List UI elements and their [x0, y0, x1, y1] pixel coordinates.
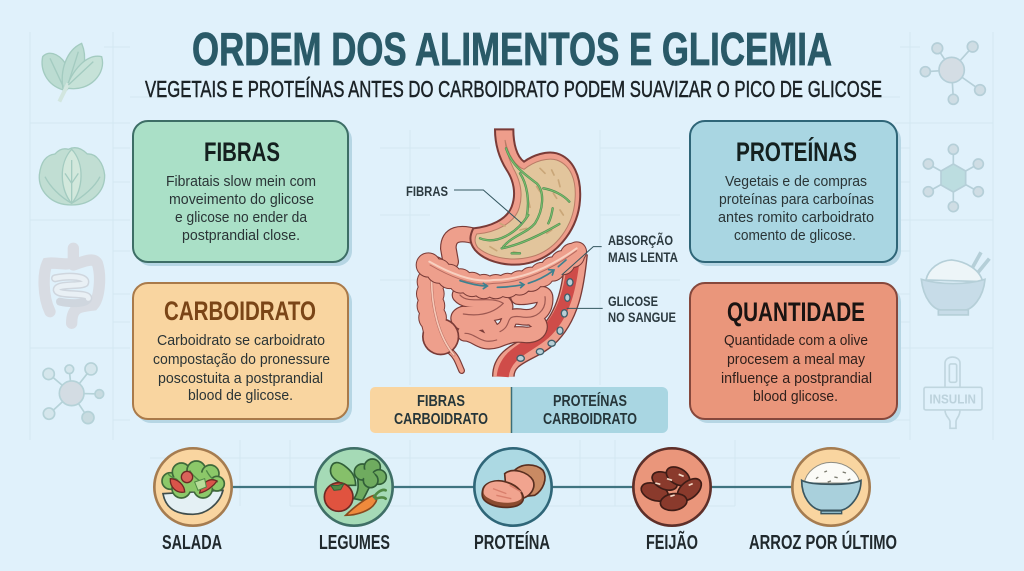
label: arroz por último: ARROZ POR ÚLTIMO	[749, 530, 897, 554]
heading: carboidrato: CARBOIDRATO	[164, 296, 316, 326]
text block: carboidrato: blood de glicose.	[188, 387, 293, 404]
label: absorção mais lenta: ABSORÇÃO	[608, 231, 673, 248]
timeline connector	[232, 486, 792, 488]
text block: carboidrato: poscostuita a postprandial	[158, 370, 323, 387]
heading: proteínas: PROTEÍNAS	[736, 137, 857, 167]
panel: proteínas	[690, 121, 901, 266]
text block: fibras	[166, 173, 316, 244]
comparison bar	[370, 387, 668, 433]
small intestine	[459, 294, 545, 341]
text block: fibras: postprandial close.	[182, 227, 300, 244]
bar labels: right: CARBOIDRATO	[543, 411, 637, 428]
heading: quantidade: QUANTIDADE	[727, 297, 865, 327]
label: legumes: LEGUMES	[319, 532, 390, 554]
text block: quantidade: procesem a meal may	[727, 351, 865, 368]
blood vessel	[503, 253, 577, 377]
duodenum	[448, 234, 477, 262]
text block: carboidrato: Carboidrato se carboidrato	[157, 332, 325, 349]
bar labels: right: PROTEÍNAS	[553, 393, 627, 410]
step: legumes	[315, 448, 393, 554]
text block: fibras: Fibratais slow mein com	[166, 173, 316, 190]
step: salada	[154, 448, 232, 554]
label: glicose no sangue	[608, 293, 676, 325]
icon: rice bowl	[792, 448, 870, 526]
label: glicose no sangue: NO SANGUE	[608, 309, 676, 325]
icon: beans	[633, 448, 711, 526]
arrows: slow absorption	[460, 260, 566, 289]
text block: proteínas: Vegetais e de compras	[725, 173, 867, 190]
label: absorção mais lenta: MAIS LENTA	[608, 249, 678, 265]
fibres	[480, 148, 569, 253]
label: salada: SALADA	[162, 532, 222, 554]
bar labels: left	[394, 393, 488, 428]
label: fibras: FIBRAS	[406, 183, 448, 199]
text block: proteínas: proteínas para carboínas	[719, 191, 874, 208]
bar labels: left: CARBOIDRATO	[394, 411, 488, 428]
side icon: insulin pen	[924, 357, 982, 428]
side icon: rice bowl	[921, 252, 989, 315]
side icon label: insulin: INSULIN	[929, 391, 976, 406]
bar labels: left: FIBRAS	[417, 393, 465, 410]
step: arroz por último	[749, 448, 897, 554]
panel: carboidrato	[133, 283, 352, 423]
text block: quantidade	[721, 332, 872, 405]
text block: proteínas: comento de glicose.	[734, 227, 856, 244]
icon: salad bowl	[154, 448, 232, 526]
side icon: molecule	[43, 363, 104, 424]
bar labels: right	[543, 393, 637, 428]
text block: carboidrato: compostação do pronessure	[153, 351, 330, 368]
side icon: hexagon molecule	[923, 144, 983, 212]
step: feijão	[633, 448, 711, 554]
text block: proteínas: antes romito carboidrato	[718, 209, 874, 226]
text block: quantidade: blood glicose.	[753, 388, 838, 405]
digestive system illustration	[422, 129, 603, 377]
leader lines	[454, 190, 603, 308]
icon: meat slices	[474, 448, 552, 526]
panel: quantidade	[690, 283, 901, 423]
stomach	[470, 129, 580, 265]
side icon: spinach leaves	[42, 43, 103, 102]
side icon: intestine	[44, 248, 100, 323]
icon: vegetables	[315, 448, 393, 526]
label: glicose no sangue: GLICOSE	[608, 293, 658, 309]
side icon: molecule top right	[920, 41, 985, 104]
large intestine	[422, 248, 577, 371]
title: ORDEM DOS ALIMENTOS E GLICEMIA	[192, 23, 832, 75]
label: feijão: FEIJÃO	[646, 531, 698, 554]
label: proteína: PROTEÍNA	[474, 531, 550, 554]
text block: quantidade: Quantidade com a olive	[724, 332, 868, 349]
text block: quantidade: influençe a postprandial	[721, 370, 872, 387]
panel: fibras	[133, 121, 352, 266]
text block: proteínas	[718, 173, 874, 244]
heading: fibras: FIBRAS	[204, 137, 280, 167]
label: absorção mais lenta	[608, 231, 678, 265]
side icon: lettuce	[39, 148, 105, 205]
text block: fibras: moveimento do glicose	[169, 191, 314, 208]
text block: carboidrato	[153, 332, 330, 404]
step: proteína	[474, 448, 552, 554]
text block: fibras: e glicose no ender da	[175, 209, 308, 226]
